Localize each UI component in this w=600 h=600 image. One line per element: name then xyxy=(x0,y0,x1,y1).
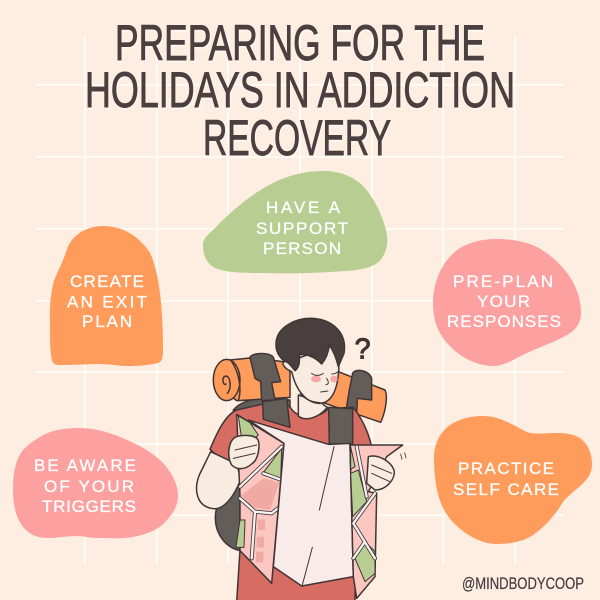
blob: have a support person: PERSON xyxy=(263,239,341,258)
question mark: ? xyxy=(355,334,371,366)
blob: pre-plan your responses: RESPONSES xyxy=(447,312,561,331)
right bedroll xyxy=(325,370,386,422)
shoulder straps xyxy=(263,398,353,444)
left hand xyxy=(229,435,259,469)
blob: practice self care: PRACTICE xyxy=(458,459,554,478)
title: RECOVERY xyxy=(203,110,391,166)
backpack xyxy=(215,398,290,551)
blob: be aware of your triggers: TRIGGERS xyxy=(42,497,136,516)
blob: create an exit plan: AN EXIT xyxy=(67,292,147,312)
title xyxy=(85,15,515,166)
blob: pre-plan your responses: PRE-PLAN xyxy=(453,272,553,291)
blob: have a support person xyxy=(203,171,387,273)
illustration: hiker reading a map xyxy=(197,318,406,600)
left arm xyxy=(197,452,241,509)
head xyxy=(276,318,344,419)
blob: practice self care xyxy=(434,416,592,544)
blob: be aware of your triggers xyxy=(13,428,178,538)
blob: create an exit plan: PLAN xyxy=(82,312,132,331)
blob: create an exit plan: CREATE xyxy=(70,272,144,291)
right hand xyxy=(367,456,394,490)
blob: be aware of your triggers: OF YOUR xyxy=(44,477,134,496)
map xyxy=(236,414,403,598)
blob: create an exit plan xyxy=(50,226,163,366)
blob: pre-plan your responses: YOUR xyxy=(477,292,530,311)
blob: have a support person: HAVE A xyxy=(266,198,341,217)
blob: be aware of your triggers: BE AWARE xyxy=(34,456,136,475)
blob: pre-plan your responses xyxy=(433,239,581,366)
blob: have a support person: SUPPORT xyxy=(256,219,348,238)
shirt xyxy=(210,404,372,600)
blob: practice self care: SELF CARE xyxy=(453,480,559,499)
left bedroll xyxy=(213,353,290,401)
